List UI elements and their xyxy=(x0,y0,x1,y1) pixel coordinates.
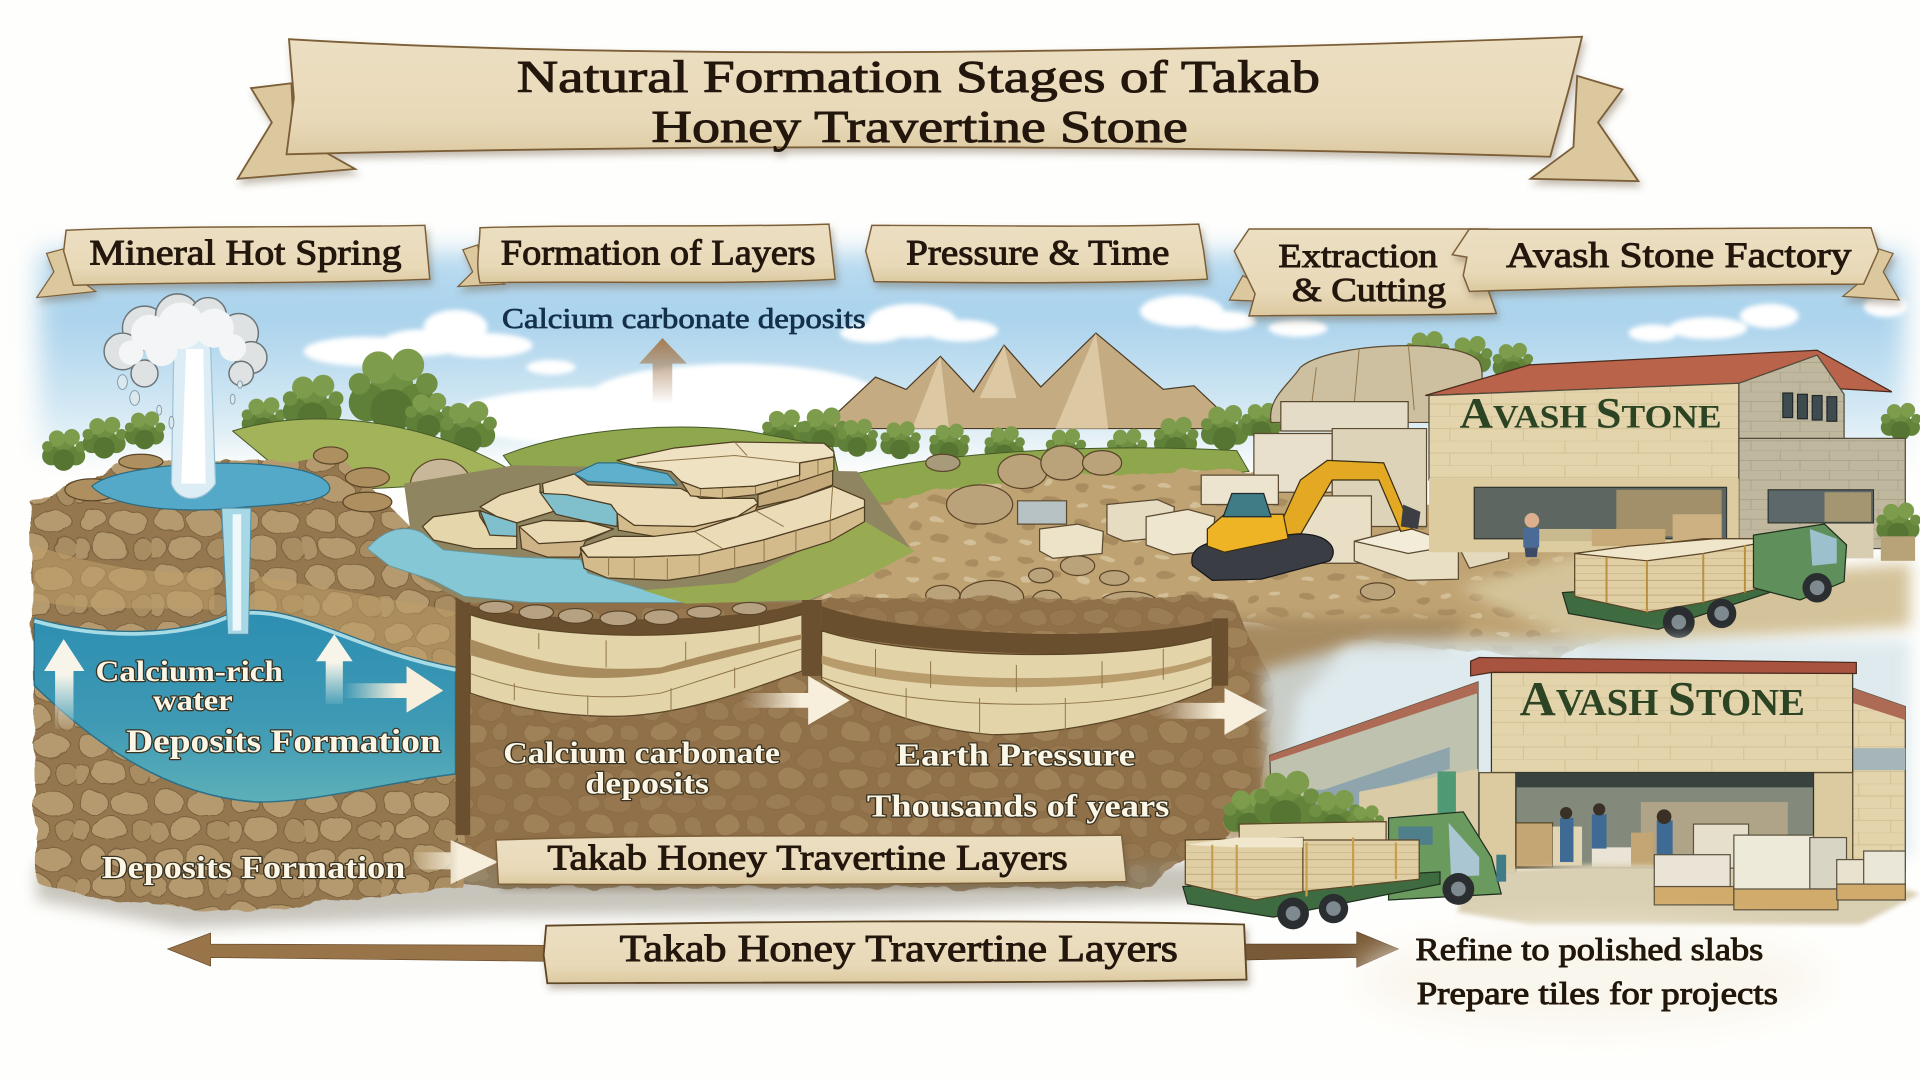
water column falling into the reservoir xyxy=(222,508,251,634)
lowest small slab xyxy=(519,520,613,557)
entrance block xyxy=(1824,524,1873,558)
arrow: upward xyxy=(639,338,687,404)
steam cloud xyxy=(104,294,267,387)
banner: Mineral Hot Spring xyxy=(37,225,430,298)
hills xyxy=(233,419,1249,551)
panel: hot spring cutaway xyxy=(31,294,471,912)
banner: Takab Honey Travertine Layers bottom xyxy=(544,921,1247,983)
text: next steps: Refine to polished slabs xyxy=(1416,932,1763,967)
banner: Formation of Layers xyxy=(458,224,835,287)
banner: Avash Stone Factory xyxy=(1452,228,1899,300)
grass right of terraces xyxy=(643,520,915,604)
banner: Avash Stone Factory: Avash Stone Factory xyxy=(1506,235,1852,275)
banner: Extraction & Cutting: Extraction xyxy=(1278,237,1438,275)
cab xyxy=(1389,812,1501,900)
building: Avash Stone quarry factory xyxy=(1425,350,1920,561)
layer column 1 xyxy=(470,600,822,716)
banner: Extraction & Cutting: & Cutting xyxy=(1292,271,1446,309)
white flow arrows xyxy=(44,634,1267,884)
label: deposits formation upper: Deposits Formation xyxy=(126,724,441,760)
label: calcium carbonate deposits: Calcium carbonate deposits xyxy=(502,304,866,335)
title banner: Honey Travertine Stone xyxy=(651,102,1188,152)
interior furniture xyxy=(1537,529,1598,541)
surface pool xyxy=(92,463,330,510)
workers xyxy=(1560,814,1673,864)
building: Avash Stone processing factory xyxy=(1224,639,1920,924)
second tier under upper slab xyxy=(758,470,833,507)
strata bands xyxy=(33,545,456,686)
straps xyxy=(1212,838,1396,896)
cutaway divider xyxy=(456,596,470,835)
label: thousands of years: Thousands of years xyxy=(867,789,1169,824)
arrow: bottom right xyxy=(1243,932,1398,967)
left tier xyxy=(480,484,557,523)
text: next steps: Prepare tiles for projects xyxy=(1417,976,1778,1011)
forecourt xyxy=(1457,864,1920,924)
underground water xyxy=(34,610,456,802)
rim stones xyxy=(65,447,392,512)
front crate xyxy=(1185,838,1303,900)
middle slab top xyxy=(542,474,758,527)
banner: Takab Honey Travertine Layers middle: Takab Honey Travertine Layers xyxy=(547,837,1068,877)
glass front xyxy=(1474,487,1727,539)
label: earth pressure: Earth Pressure xyxy=(896,737,1135,772)
banner: Pressure & Time xyxy=(866,224,1207,283)
far-left tier xyxy=(422,511,517,549)
pallet stacks xyxy=(1654,824,1905,910)
label: calcium carbonate deposits in ground: deposits xyxy=(585,766,709,800)
sign: AVASH STONE xyxy=(1460,390,1722,437)
banner: Mineral Hot Spring: Mineral Hot Spring xyxy=(89,232,402,272)
label: calcium-rich water: Calcium-rich xyxy=(96,656,283,688)
label: calcium-rich water: water xyxy=(153,685,233,717)
mountains xyxy=(820,333,1239,429)
geyser jet xyxy=(171,337,216,498)
ground: quarry terrain xyxy=(808,446,1910,857)
label: deposits formation lower: Deposits Formation xyxy=(102,850,406,885)
bush xyxy=(1224,789,1276,838)
roof xyxy=(1425,350,1892,396)
arrow: pressure right xyxy=(1157,688,1267,735)
water stream xyxy=(367,529,698,602)
lower window xyxy=(1768,490,1873,523)
plant xyxy=(1876,503,1920,544)
banner: Pressure & Time: Pressure & Time xyxy=(906,232,1169,272)
sign tower xyxy=(1491,672,1853,773)
left cascades xyxy=(480,492,617,536)
trees xyxy=(42,331,1920,471)
banner: Extraction & Cutting xyxy=(1229,229,1496,316)
sky xyxy=(39,251,1908,465)
banner: Takab Honey Travertine Layers middle xyxy=(496,835,1127,885)
label: calcium-rich water xyxy=(96,656,283,717)
rock body xyxy=(31,459,463,912)
arrow: layers right xyxy=(741,676,850,725)
label: calcium carbonate deposits in ground xyxy=(503,736,780,800)
icon: excavator xyxy=(1192,460,1420,580)
ground beneath terraces xyxy=(404,465,912,602)
arrow: reservoir right xyxy=(343,666,443,713)
label: calcium carbonate deposits in ground: Calcium carbonate xyxy=(503,736,780,770)
banner: Formation of Layers: Formation of Layers xyxy=(501,232,816,272)
scroll body xyxy=(287,37,1582,157)
text: next steps xyxy=(1359,931,1824,1029)
left wing xyxy=(1270,682,1478,867)
title text: Natural Formation Stages of Takab xyxy=(517,52,1320,102)
interior crates xyxy=(1516,823,1553,867)
arrow: to layers xyxy=(410,840,498,884)
droplets xyxy=(118,375,242,429)
icon: truck 1 xyxy=(1562,524,1847,638)
upper crate xyxy=(1239,822,1386,845)
right wing details xyxy=(1853,688,1905,720)
title banner xyxy=(238,37,1638,181)
upper slab side xyxy=(681,452,834,498)
front facade xyxy=(1429,383,1739,480)
pillars xyxy=(1479,773,1516,873)
layer column 2 xyxy=(822,606,1228,735)
icon: truck 2 xyxy=(1183,812,1506,929)
arrow: water up left xyxy=(44,639,84,729)
arrow: bottom left xyxy=(168,933,545,966)
rear crate xyxy=(1303,840,1419,891)
travertine terraces xyxy=(422,442,864,580)
arrow: water up middle xyxy=(316,634,353,704)
small upper pool xyxy=(574,463,677,485)
building: Avash Stone processing factory: AVASH STONE xyxy=(1520,671,1805,726)
underground soil xyxy=(37,598,1273,928)
ribbon tails xyxy=(238,83,355,179)
flatbed xyxy=(1183,872,1440,917)
surface stones xyxy=(479,601,767,626)
banner: Takab Honey Travertine Layers bottom: Takab Honey Travertine Layers xyxy=(620,928,1178,970)
clouds xyxy=(304,295,1908,446)
middle slab side xyxy=(617,503,758,536)
bay opening xyxy=(1516,773,1813,868)
lower big slab top xyxy=(580,486,864,557)
upper slab top xyxy=(617,442,834,489)
upper windows xyxy=(1783,393,1837,421)
worker xyxy=(1523,513,1539,557)
right grey wing xyxy=(1739,355,1844,441)
lower big slab side xyxy=(580,507,864,580)
quarry rock and blocks xyxy=(1018,343,1509,580)
